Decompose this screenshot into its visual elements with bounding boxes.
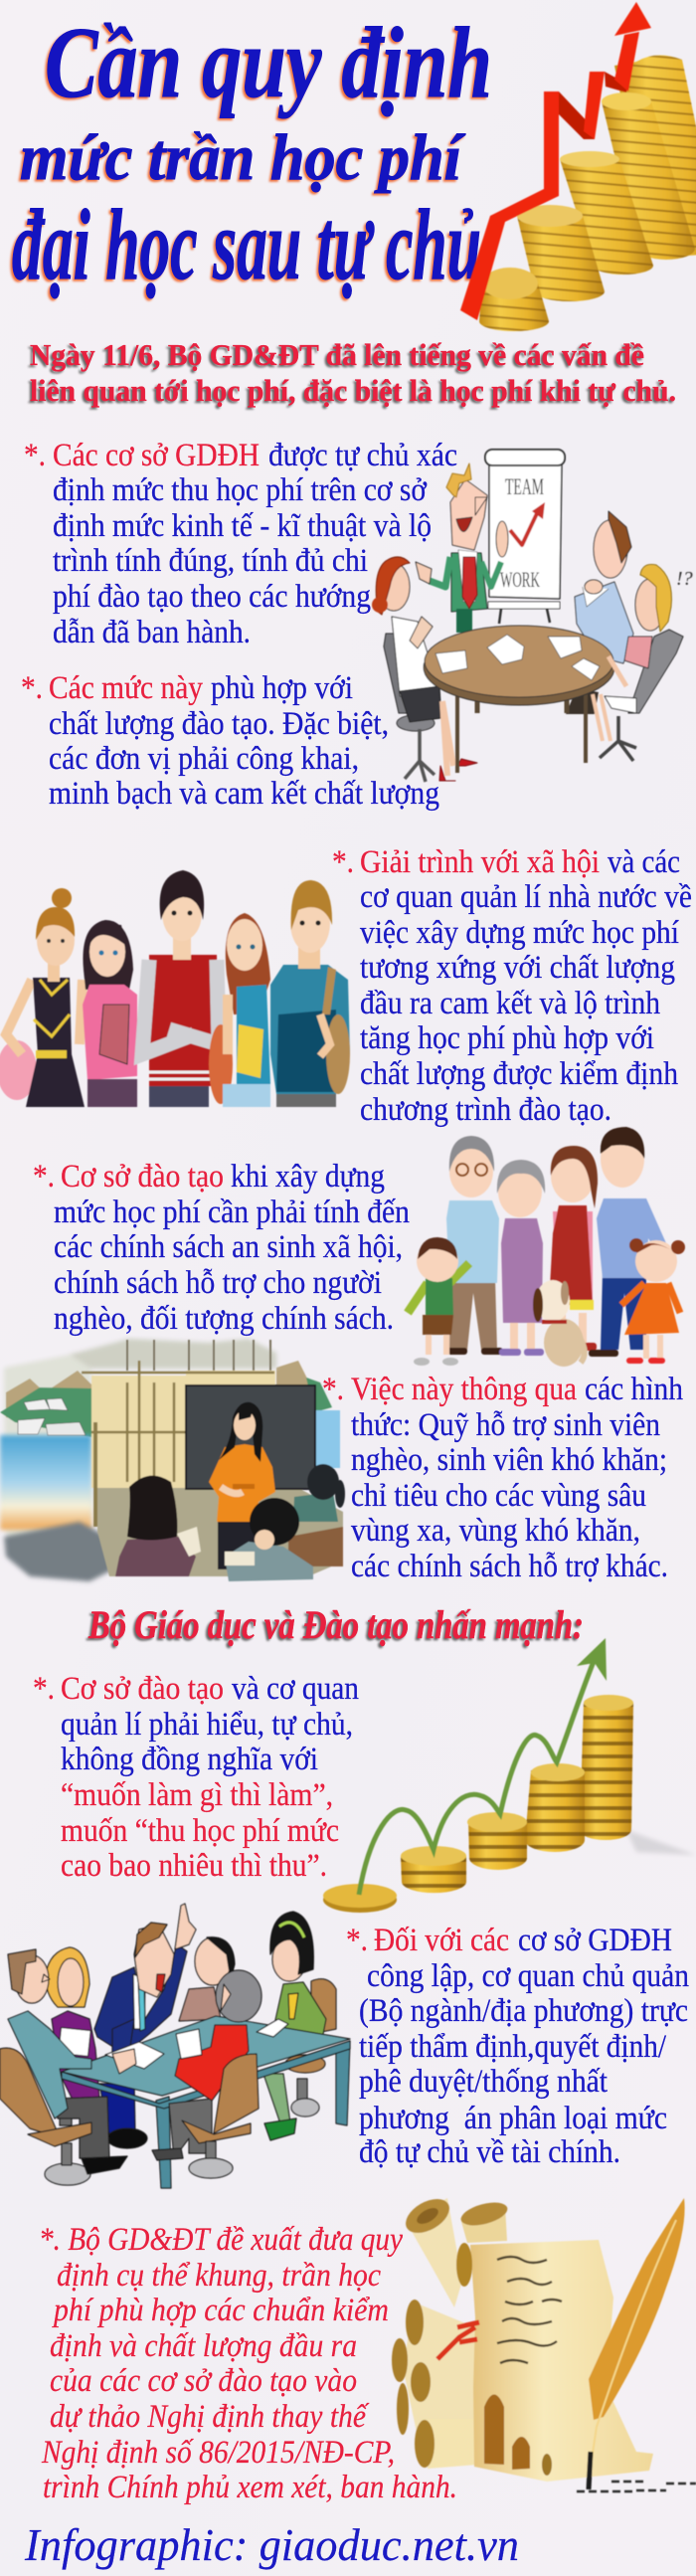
student 2	[83, 920, 137, 1107]
subtitle: liên quan tới học phí, đặc biệt là học phí khi tự chủ.	[30, 373, 676, 408]
text block: hiểu tự chủ: “muốn làm gì thì làm”,	[61, 1777, 333, 1813]
bamboo wall	[82, 1340, 343, 1576]
text block: hình thức hỗ trợ: thức: Quỹ hỗ trợ sinh viên	[351, 1407, 660, 1443]
student right with desk	[288, 1464, 345, 1566]
main parchment	[437, 2240, 653, 2482]
text block: hình thức hỗ trợ: nghèo, sinh viên khó khăn;	[351, 1442, 667, 1478]
text block: hình thức hỗ trợ: Việc này thông qua	[351, 1372, 577, 1407]
subtitle	[30, 337, 676, 408]
text block: tự chủ định mức: định mức thu học phí trên cơ sở	[53, 472, 427, 508]
text block: đề xuất quy định: định và chất lượng đầu ra	[50, 2328, 357, 2364]
text block: đề xuất quy định: định cụ thể khung, trần học	[57, 2258, 381, 2294]
text block: hiểu tự chủ: cao bao nhiêu thì thu”.	[61, 1848, 327, 1884]
text block: cơ sở GDĐH công lập: phê duyệt/thống nhất	[359, 2064, 608, 2100]
grandmother	[497, 1160, 545, 1356]
mother	[549, 1146, 598, 1351]
text block: tự chủ định mức: trình tính đúng, tính đủ chi	[53, 543, 368, 579]
text block: tự chủ định mức: phí đào tạo theo các hướng	[53, 579, 371, 615]
presenter	[416, 463, 508, 633]
dog	[533, 1280, 585, 1367]
text block: cơ sở GDĐH công lập: phương án phân loại mức	[359, 2101, 667, 2136]
text block: giải trình	[332, 844, 692, 1128]
woman left with chair	[372, 557, 477, 782]
text block: an sinh xã hội: khi xây dựng	[231, 1159, 385, 1195]
text block: giải trình: Giải trình với xã hội	[360, 844, 600, 880]
text block: cơ sở GDĐH công lập: *.	[346, 1923, 368, 1958]
text block: hiểu tự chủ: *.	[33, 1671, 55, 1707]
blonde woman	[46, 1947, 99, 2104]
text block: cơ sở GDĐH công lập: cơ sở GDĐH	[518, 1923, 672, 1958]
woman right in green	[263, 1912, 336, 2140]
text block: hiểu tự chủ: không đồng nghĩa với	[61, 1742, 318, 1777]
table with papers	[424, 626, 614, 773]
quill	[577, 2198, 696, 2491]
man right	[566, 511, 633, 714]
text block: chất lượng	[21, 670, 439, 812]
footer credit: Infographic: giaoduc.net.vn	[24, 2519, 519, 2570]
student 3	[142, 870, 219, 1107]
text block: tự chủ định mức	[24, 438, 457, 650]
text block: tự chủ định mức: Các cơ sở GDĐH	[53, 438, 260, 473]
illustration: group meeting cartoon	[0, 1904, 350, 2188]
text block: đề xuất quy định: phí phù hợp các chuẩn kiểm	[52, 2293, 389, 2328]
text block: an sinh xã hội: chính sách hỗ trợ cho người	[54, 1265, 382, 1301]
table	[62, 2016, 350, 2188]
father	[589, 1127, 666, 1357]
woman right with chair: !?	[676, 568, 693, 590]
boy	[408, 1237, 469, 1366]
text block: hình thức hỗ trợ: *.	[322, 1372, 344, 1407]
text block: cơ sở GDĐH công lập	[346, 1923, 689, 2170]
student 5	[270, 880, 350, 1107]
text block: đề xuất quy định: Nghị định số 86/2015/NĐ-CP,	[41, 2435, 395, 2471]
text block: giải trình: *.	[332, 844, 354, 880]
text block: an sinh xã hội: mức học phí cần phải tính đến	[54, 1195, 410, 1230]
back scrolls	[392, 2192, 510, 2469]
student 4	[209, 913, 270, 1107]
student back right	[225, 1498, 313, 1581]
text block: tự chủ định mức: *.	[24, 438, 46, 473]
flipchart: TEAM	[505, 474, 544, 499]
text block: an sinh xã hội: các chính sách an sinh xã hội,	[54, 1229, 403, 1265]
text block: chất lượng: các đơn vị phải công khai,	[49, 741, 359, 777]
text block: đề xuất quy định: *. Bộ GD&ĐT đề xuất đưa quy	[39, 2222, 403, 2258]
text block: an sinh xã hội	[33, 1159, 410, 1337]
teacher	[209, 1402, 275, 1569]
illustration: coin stacks with green growth arrow	[323, 1638, 696, 1913]
text block: chất lượng: *.	[21, 670, 43, 706]
text block: cơ sở GDĐH công lập: tiếp thẩm định,quyết định/	[359, 2029, 667, 2065]
text block: hiểu tự chủ: muốn “thu học phí mức	[61, 1813, 339, 1849]
title: Cần quy định	[45, 7, 492, 119]
text block: tự chủ định mức: được tự chủ xác	[268, 438, 457, 473]
text block: an sinh xã hội: Cơ sở đào tạo	[61, 1159, 224, 1195]
text block: đề xuất quy định	[39, 2222, 457, 2505]
illustration: team meeting with flipchart	[372, 450, 693, 782]
flipchart	[485, 450, 565, 624]
text block: giải trình: chương trình đào tạo.	[360, 1092, 611, 1128]
text block: chất lượng: phù hợp với	[211, 670, 353, 706]
text block: đề xuất quy định: dự thảo Nghị định thay thế	[50, 2399, 370, 2435]
text block: hiểu tự chủ: Cơ sở đào tạo	[61, 1671, 224, 1707]
heading: Bộ Giáo dục nhấn mạnh: Bộ Giáo dục và Đào tạo nhấn mạnh:	[87, 1602, 584, 1647]
text block: đề xuất quy định: của các cơ sở đào tạo vào	[50, 2363, 357, 2399]
illustration: mountain classroom	[0, 1339, 345, 1581]
grandfather	[446, 1136, 503, 1355]
text block: cơ sở GDĐH công lập: Đối với các	[374, 1923, 509, 1958]
text block: hiểu tự chủ: quản lí phải hiểu, tự chủ,	[61, 1707, 353, 1743]
text block: tự chủ định mức: định mức kinh tế - kĩ thuật và lộ	[53, 508, 432, 544]
text block: chất lượng: minh bạch và cam kết chất lượng	[49, 776, 439, 812]
girl	[621, 1238, 685, 1364]
text block: giải trình: đầu ra cam kết và lộ trình	[360, 986, 660, 1021]
grey-haired woman in red with chair	[152, 1970, 261, 2178]
text block: giải trình: và các	[608, 844, 680, 880]
sketchy landscape backdrop	[0, 1339, 340, 1581]
student 1 with pompom	[0, 888, 85, 1107]
text block: hiểu tự chủ: và cơ quan	[232, 1671, 359, 1707]
standing man	[94, 1904, 196, 2148]
text block: hình thức hỗ trợ	[322, 1372, 683, 1584]
illustration: parchment scrolls and quill	[392, 2192, 696, 2491]
man left with chair	[0, 1949, 127, 2185]
icon: gold coin stacks with rising red arrow	[460, 2, 696, 331]
text block: hình thức hỗ trợ: chỉ tiêu cho các vùng sâu	[351, 1478, 646, 1514]
title: mức trần học phí	[20, 121, 465, 194]
text block: chất lượng: Các mức này	[49, 670, 203, 706]
woman right with chair	[593, 564, 693, 761]
student back left	[115, 1476, 201, 1576]
text block: cơ sở GDĐH công lập: độ tự chủ về tài chính.	[359, 2134, 620, 2170]
title	[12, 7, 492, 301]
text block: đề xuất quy định: trình Chính phủ xem xét, ban hành.	[43, 2470, 457, 2505]
flipchart: WORK	[500, 567, 540, 592]
text block: hình thức hỗ trợ: vùng xa, vùng khó khăn,	[351, 1513, 640, 1549]
text block: tự chủ định mức: dẫn đã ban hành.	[53, 615, 251, 650]
text block: hình thức hỗ trợ: các hình	[585, 1372, 683, 1407]
illustration: family with dog	[408, 1127, 685, 1367]
text block: an sinh xã hội: *.	[33, 1159, 55, 1195]
illustration: five students	[0, 870, 350, 1107]
text block: giải trình: tăng học phí phù hợp với	[360, 1020, 654, 1056]
man at back	[179, 1937, 235, 2021]
blackboard	[186, 1385, 315, 1489]
text block: an sinh xã hội: nghèo, đối tượng chính sách.	[54, 1301, 394, 1337]
text block: hiểu tự chủ	[33, 1671, 359, 1884]
subtitle: Ngày 11/6, Bộ GD&ĐT đã lên tiếng về các vấn đề	[30, 337, 644, 372]
text block: chất lượng: chất lượng đào tạo. Đặc biệt,	[49, 706, 389, 742]
